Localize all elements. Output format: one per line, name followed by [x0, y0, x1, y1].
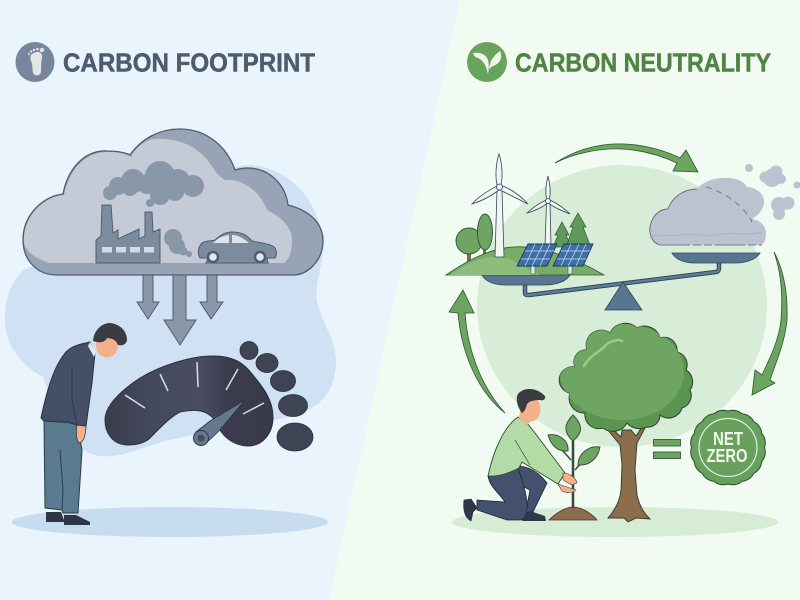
back shoe	[464, 499, 477, 521]
car	[198, 232, 276, 263]
exhaust smoke	[164, 229, 192, 257]
ground shadow	[12, 507, 328, 537]
renewable island	[446, 154, 604, 275]
wind turbine large	[472, 154, 528, 257]
stem	[572, 440, 574, 508]
person planting	[464, 389, 577, 521]
arrow: cycle right	[752, 252, 787, 395]
arrow: cycle top	[555, 144, 698, 172]
smoke puffs	[745, 164, 800, 220]
left panel background	[0, 0, 460, 600]
hands	[563, 473, 577, 485]
net zero badge: NET	[713, 429, 743, 449]
trousers	[44, 421, 82, 513]
front shoe	[522, 512, 546, 521]
equals sign	[654, 440, 680, 458]
hand	[76, 424, 86, 443]
sweater	[488, 417, 565, 484]
net zero badge: ZERO	[706, 446, 748, 466]
panel: carbon footprint	[5, 42, 336, 537]
hill	[446, 247, 604, 275]
hair	[93, 323, 127, 345]
pine trees	[553, 213, 590, 247]
far leg	[517, 466, 547, 512]
canopy	[559, 323, 693, 431]
face	[96, 334, 118, 358]
background circle	[477, 165, 767, 447]
gauge needle	[194, 400, 245, 446]
dissolving grey cloud	[650, 164, 800, 245]
gauge ticks	[125, 362, 264, 414]
person looking down	[41, 323, 127, 525]
right pan	[672, 253, 760, 263]
smoke	[103, 161, 204, 207]
balance scale	[482, 253, 760, 310]
heading: carbon neutrality	[467, 42, 771, 82]
face	[522, 396, 540, 422]
arrows down	[137, 275, 223, 345]
shoes	[46, 512, 64, 522]
cloud with pollution	[23, 129, 323, 275]
ground shadow	[452, 507, 778, 537]
heading text: CARBON NEUTRALITY	[515, 48, 771, 78]
beam	[525, 262, 719, 295]
wind turbine small	[527, 176, 570, 245]
toes	[240, 342, 313, 451]
leaves	[566, 415, 581, 441]
solar panel one	[517, 244, 557, 274]
collar	[88, 342, 96, 357]
solar panel two	[553, 244, 593, 274]
round tree	[456, 228, 482, 263]
heading text: CARBON FOOTPRINT	[63, 48, 315, 78]
fulcrum	[605, 282, 642, 310]
left pan	[482, 275, 570, 285]
near leg	[477, 468, 527, 520]
footprint gauge	[105, 342, 313, 451]
sapling	[548, 415, 600, 520]
jacket	[41, 342, 95, 426]
factory	[96, 205, 160, 263]
hair	[517, 389, 545, 413]
oval tree	[478, 214, 492, 257]
soil mound	[549, 507, 597, 520]
background blob	[5, 165, 336, 456]
heading: carbon footprint	[16, 42, 315, 82]
icon: footprint badge	[16, 42, 54, 82]
icon: leaf badge	[467, 42, 507, 82]
net zero badge	[691, 410, 765, 485]
arrow: cycle left	[449, 290, 505, 413]
neck	[519, 410, 532, 425]
panel: carbon neutrality	[446, 42, 800, 537]
large tree	[559, 323, 693, 522]
trunk	[607, 424, 650, 522]
